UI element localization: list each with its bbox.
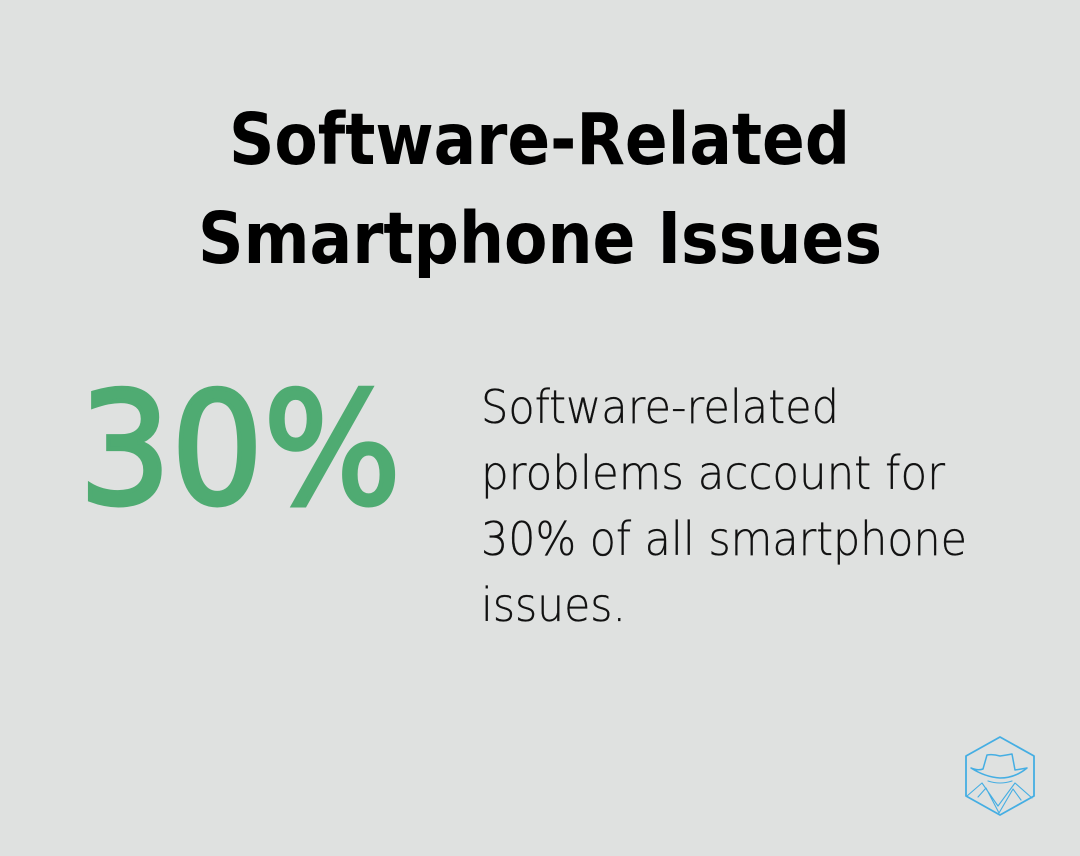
icon: hat — [971, 754, 1027, 778]
description text: issues. — [481, 578, 626, 632]
description text — [481, 380, 967, 632]
big statistic: 30%: 30% — [79, 359, 401, 540]
title: Smartphone Issues — [198, 197, 882, 280]
icon: coat lapels — [967, 781, 1032, 813]
description text: 30% of all smartphone — [481, 512, 967, 566]
title: Software-Related — [229, 98, 850, 181]
icon: hexagon logo with hat and coat — [966, 737, 1034, 815]
icon: hexagon outline — [966, 737, 1034, 815]
title — [198, 98, 882, 280]
description text: problems account for — [481, 446, 945, 500]
description text: Software-related — [481, 380, 839, 434]
